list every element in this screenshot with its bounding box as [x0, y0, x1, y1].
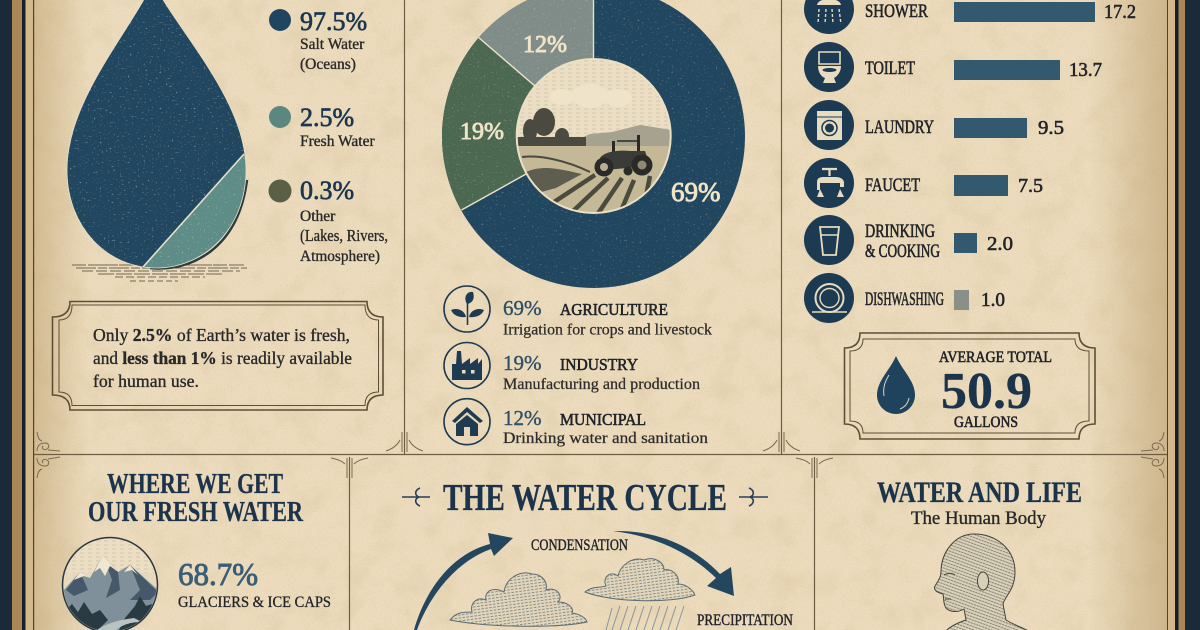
- legend: other: Other: [300, 208, 336, 225]
- sector: agriculture: AGRICULTURE: [560, 300, 668, 319]
- callout: fresh water fact: Only 2.5% of Earth’s water is fresh,: [93, 325, 350, 345]
- panel: water and life: [877, 476, 1082, 630]
- label: condensation: CONDENSATION: [531, 537, 628, 554]
- stat: glaciers: [178, 556, 331, 611]
- icon: mountains: [62, 538, 158, 630]
- panel: fresh water sources: [62, 469, 331, 630]
- donut chart: [442, 0, 745, 288]
- row: drinking and cooking: & COOKING: [865, 242, 940, 262]
- sector: industry: 19%: [503, 351, 542, 375]
- row: dishwashing: 1.0: [981, 289, 1005, 311]
- panel: water use by sector: [430, 0, 760, 447]
- callout: average total: [844, 333, 1095, 439]
- icon: faucet: [804, 158, 854, 208]
- heading: [88, 469, 304, 528]
- icon: plate: [804, 273, 854, 323]
- sector: municipal: Drinking water and sanitation: [503, 430, 708, 447]
- callout: average total: 50.9: [941, 363, 1032, 420]
- legend: fresh water: Fresh Water: [300, 133, 375, 150]
- icon: shower: [804, 0, 854, 34]
- panel: earth's water: [52, 0, 388, 410]
- row: drinking and cooking: [804, 215, 1013, 265]
- sector: municipal: MUNICIPAL: [560, 410, 646, 429]
- row: laundry: LAUNDRY: [865, 118, 934, 138]
- sector: industry: INDUSTRY: [560, 355, 638, 374]
- row: shower: 17.2: [1104, 1, 1136, 23]
- icon: house: [444, 399, 490, 445]
- callout: average total: AVERAGE TOTAL: [939, 349, 1052, 366]
- label: precipitation: PRECIPITATION: [697, 612, 793, 629]
- row: drinking and cooking: DRINKING: [865, 222, 935, 242]
- icon: toilet: [804, 42, 854, 92]
- row: faucet: FAUCET: [865, 176, 920, 196]
- outer border: right: [1167, 0, 1200, 630]
- row: faucet: 7.5: [1018, 175, 1043, 197]
- icon: factory: [444, 342, 490, 388]
- row: faucet: [804, 158, 1043, 208]
- illustration: human head: [934, 534, 1030, 630]
- subheading: The Human Body: [911, 509, 1047, 529]
- icon: plant: [444, 286, 490, 332]
- icon: washing machine: [804, 100, 854, 150]
- outer border: left: [0, 0, 34, 630]
- sector: municipal: [444, 399, 708, 447]
- donut chart: 19%: [460, 119, 504, 145]
- sector: agriculture: Irrigation for crops and livestock: [503, 322, 712, 338]
- sector: industry: [444, 342, 700, 393]
- arrow: condensation to precipitation: [613, 531, 734, 596]
- donut chart: 12%: [523, 32, 567, 58]
- callout: average total: GALLONS: [954, 414, 1018, 431]
- row: toilet: [804, 42, 1102, 92]
- sector: industry: Manufacturing and production: [503, 376, 700, 393]
- tractor: [594, 135, 652, 176]
- heading: WHERE WE GET: [107, 469, 283, 500]
- donut chart: 69%: [671, 177, 720, 207]
- heading: WATER AND LIFE: [877, 476, 1082, 509]
- icon: drop: [877, 356, 915, 414]
- heading: OUR FRESH WATER: [88, 497, 304, 528]
- callout: fresh water fact: [52, 302, 383, 410]
- stat: glaciers: GLACIERS & ICE CAPS: [178, 594, 331, 611]
- illustration: clouds: [450, 559, 695, 626]
- row: dishwashing: DISHWASHING: [865, 290, 944, 310]
- row: shower: SHOWER: [865, 2, 929, 22]
- legend: other: [268, 176, 388, 265]
- farm vignette: [515, 55, 675, 218]
- row: dishwashing: [804, 273, 1005, 323]
- illustration: rain: [606, 606, 684, 630]
- legend: fresh water: [269, 103, 375, 150]
- legend: other: Atmosphere): [300, 248, 380, 265]
- arrow: evaporation up to condensation: [414, 533, 513, 630]
- row: laundry: [804, 100, 1064, 150]
- row: laundry: 9.5: [1038, 117, 1064, 139]
- legend: fresh water: 2.5%: [300, 103, 354, 132]
- sector: municipal: 12%: [503, 406, 542, 430]
- panel: water cycle: [402, 477, 793, 630]
- sector: agriculture: 69%: [503, 296, 542, 320]
- sector: agriculture: [444, 286, 712, 338]
- row: toilet: 13.7: [1069, 59, 1102, 81]
- callout: fresh water fact: and less than 1% is readily available: [93, 348, 352, 368]
- icon: glass: [804, 215, 854, 265]
- row: toilet: TOILET: [865, 59, 915, 79]
- water drop chart: [60, 0, 260, 281]
- legend: salt water: (Oceans): [300, 56, 356, 73]
- legend: other: 0.3%: [300, 176, 354, 205]
- callout: fresh water fact: for human use.: [93, 371, 199, 391]
- legend: salt water: 97.5%: [300, 7, 367, 36]
- panel: household water use: [804, 0, 1136, 439]
- legend: other: (Lakes, Rivers,: [300, 226, 388, 245]
- legend: salt water: Salt Water: [300, 36, 365, 53]
- stat: glaciers: 68.7%: [178, 556, 258, 592]
- title: THE WATER CYCLE: [443, 477, 727, 519]
- row: shower: [804, 0, 1136, 34]
- legend: salt water: [269, 7, 367, 73]
- row: drinking and cooking: 2.0: [987, 233, 1013, 255]
